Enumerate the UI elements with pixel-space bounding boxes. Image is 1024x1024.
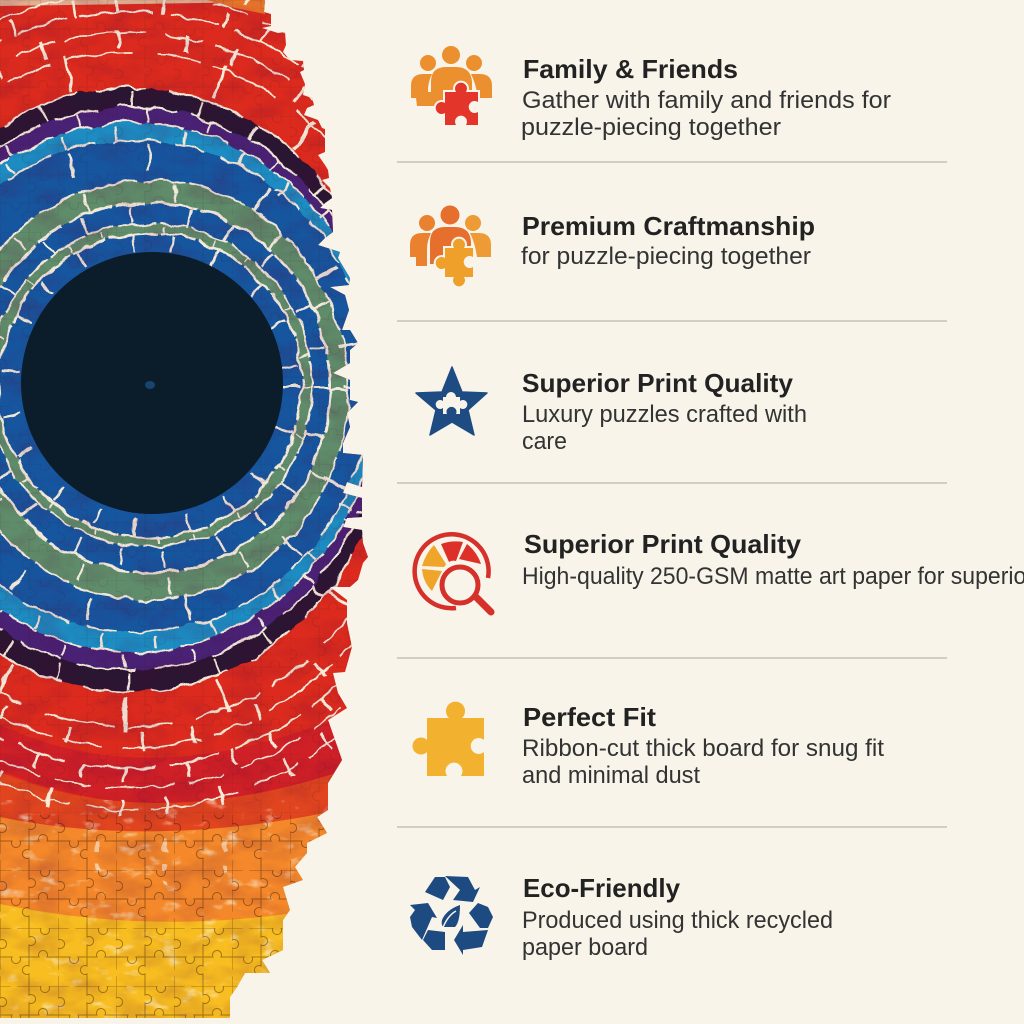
puzzle cut lines [0, 0, 370, 1020]
feature 2: premium craftmanship [410, 206, 815, 286]
text block: Ribbon-cut thick board for snug fit [522, 735, 884, 762]
ring: purple [0, 107, 386, 670]
cracks in the red and orange fields [0, 0, 352, 886]
ring: light blue [0, 123, 378, 652]
heading: Perfect Fit [523, 702, 656, 732]
feature 5: perfect fit [412, 702, 884, 789]
paint mottling [0, 0, 370, 1024]
text block [522, 735, 884, 789]
heading: Superior Print Quality [522, 368, 794, 398]
text block [522, 401, 807, 455]
concentric rings [0, 88, 395, 692]
icon: colour wheel with magnifier [415, 534, 491, 612]
chalk texture on orange and yellow [0, 835, 340, 1024]
text block: and minimal dust [522, 762, 700, 789]
ring: outer blue [0, 140, 370, 632]
icon: people with red puzzle piece [411, 46, 492, 125]
text block: puzzle-piecing together [521, 114, 781, 141]
icon: yellow puzzle piece [412, 702, 484, 776]
dividers [397, 161, 947, 828]
feature 1: family and friends [411, 46, 891, 141]
icon: people with orange puzzle piece [410, 206, 491, 286]
ring: inner blue [0, 233, 302, 538]
heading: Superior Print Quality [524, 529, 802, 559]
text block: Luxury puzzles crafted with [522, 401, 807, 428]
heading: Premium Craftmanship [522, 211, 815, 241]
feature 3: superior print quality [416, 367, 807, 455]
feature 6: eco-friendly [410, 873, 833, 961]
yellow band [0, 904, 288, 1018]
icon: star with puzzle piece [416, 367, 487, 435]
text block [522, 907, 833, 961]
radial cracks between ring pieces [0, 98, 390, 682]
text block [521, 87, 891, 141]
feature 4: paper quality [415, 529, 1024, 612]
outer red field [0, 0, 400, 845]
ring: inner green [0, 223, 312, 547]
icon: recycling arrows with leaf [410, 876, 493, 955]
ring: outer green [0, 180, 348, 600]
orange band [0, 814, 327, 997]
ring: near-black [0, 88, 395, 692]
text block: for puzzle-piecing together [521, 243, 811, 270]
heading: Eco-Friendly [523, 873, 681, 903]
text block: paper board [522, 934, 648, 961]
central dark circle [21, 252, 283, 514]
text block: Gather with family and friends for [522, 87, 891, 114]
text block: care [522, 428, 567, 455]
panel: puzzle artwork [0, 0, 368, 1018]
text block: Produced using thick recycled [522, 907, 833, 934]
small blue dot in centre [145, 381, 155, 389]
heading: Family & Friends [523, 54, 738, 84]
ring: middle blue [0, 203, 330, 572]
